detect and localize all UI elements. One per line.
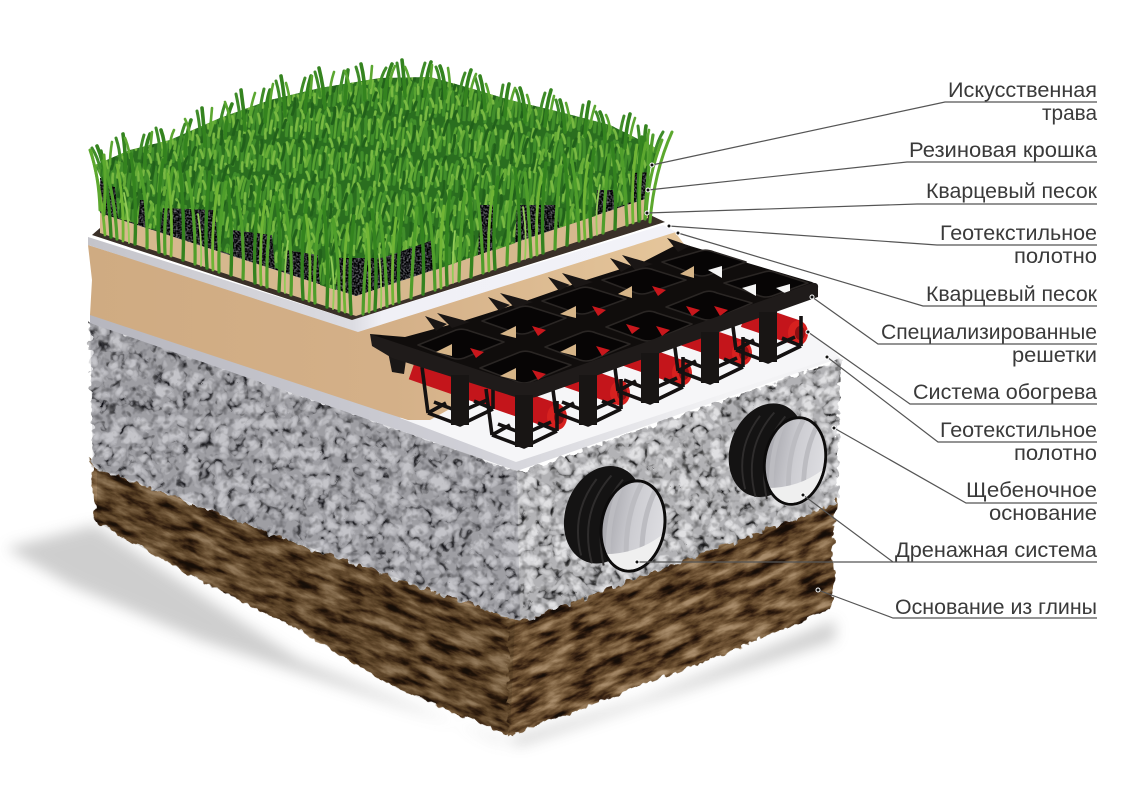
leader lines	[637, 102, 1097, 618]
clay right face	[508, 495, 837, 736]
layer: clay base	[91, 458, 837, 741]
label: geotextile 2: полотно	[1014, 442, 1097, 465]
layer: lower geotextile	[90, 250, 840, 471]
label: geotextile 2: Геотекстильное	[940, 419, 1097, 442]
label: grids: решетки	[1012, 344, 1097, 367]
label: artificial grass: трава	[1042, 102, 1097, 125]
grid	[370, 238, 818, 447]
label: quartz sand 2: Кварцевый песок	[926, 283, 1098, 306]
edge blades	[90, 132, 672, 222]
see-through glimpses red	[470, 286, 728, 380]
label: crushed stone: основание	[989, 502, 1097, 525]
leader dots	[635, 163, 836, 592]
heating pipes	[413, 315, 798, 417]
grass base	[95, 77, 660, 290]
label: geotextile 2	[940, 419, 1097, 465]
silhouette tips	[92, 60, 663, 180]
grid legs	[422, 302, 801, 447]
grass mass	[92, 60, 663, 290]
grass blades texture	[95, 77, 660, 290]
label: artificial grass: Искусственная	[948, 79, 1097, 102]
label: heating: Система обогрева	[913, 381, 1097, 404]
layer: upper geotextile	[88, 225, 676, 332]
light blade highlights	[124, 185, 600, 309]
dark front blades	[101, 137, 642, 314]
label: rubber crumb: Резиновая крошка	[909, 139, 1097, 162]
grid teeth	[425, 238, 690, 331]
grid front rim	[370, 283, 818, 398]
label: quartz sand: Кварцевый песок	[926, 180, 1098, 203]
label: crushed stone	[966, 479, 1097, 525]
label: clay: Основание из глины	[895, 596, 1097, 619]
label: grids: Специализированные	[881, 321, 1097, 344]
grass front blades	[90, 132, 672, 314]
see-through glimpses white	[708, 266, 790, 296]
label: artificial grass	[948, 79, 1097, 125]
pipe 3	[590, 341, 682, 373]
pipe 2	[525, 360, 620, 393]
label: grids	[881, 321, 1097, 367]
mid front blades	[103, 135, 653, 314]
bright front blades	[91, 145, 637, 312]
clay left face	[91, 458, 525, 741]
label: crushed stone: Щебеночное	[966, 479, 1097, 502]
label: geotextile	[940, 222, 1097, 268]
see-through glimpses sand	[436, 266, 694, 380]
grid cells	[418, 250, 808, 383]
pipe ends	[547, 320, 808, 430]
gravel left face shade	[90, 320, 520, 621]
drainage pipe front	[548, 452, 676, 581]
drainage pipes	[548, 390, 837, 581]
grass flecks texture	[95, 77, 660, 290]
label: drainage: Дренажная система	[895, 539, 1097, 562]
layer: gravel base	[90, 320, 840, 622]
layer: rubber crumb	[100, 158, 650, 296]
clay left shade	[97, 470, 515, 733]
grid front legs upper	[451, 312, 777, 420]
labels	[881, 79, 1098, 619]
gravel faces	[90, 320, 840, 622]
grid top web	[370, 243, 817, 390]
grass tips texture	[95, 77, 660, 290]
lower geotextile top surface	[400, 250, 838, 462]
pipe 5	[745, 315, 798, 333]
layer: turf dark backing	[92, 214, 665, 320]
drainage pipe rear	[714, 390, 837, 514]
label: geotextile: полотно	[1014, 245, 1097, 268]
pipe 1	[413, 367, 557, 417]
layer: sand with slope	[88, 232, 695, 420]
label: geotextile: Геотекстильное	[940, 222, 1097, 245]
layer: turf sand band	[100, 198, 648, 316]
ground shadow	[6, 525, 835, 745]
grid hook	[388, 352, 406, 374]
pipe 4	[660, 325, 742, 353]
